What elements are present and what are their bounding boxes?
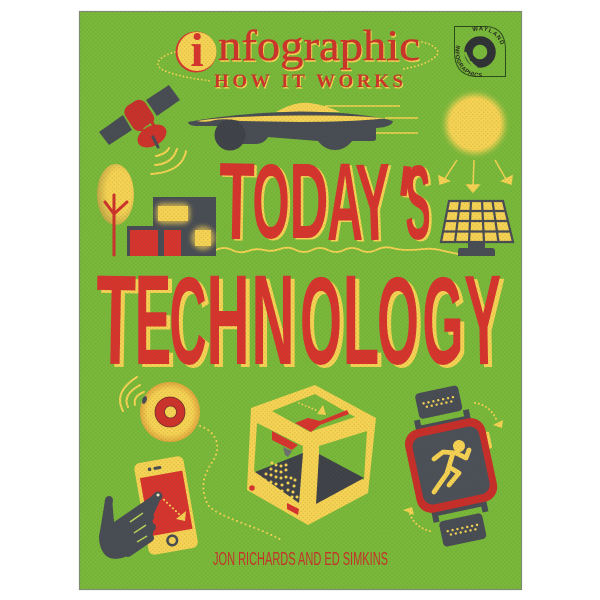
smartphone: [133, 455, 199, 556]
chassis: [188, 112, 393, 150]
solar car: [188, 103, 418, 150]
main title: technology: N: [251, 250, 295, 392]
smartwatch: [395, 381, 510, 551]
main title: today's: S: [405, 143, 431, 262]
solar panel: [441, 201, 513, 256]
main title: today's: O: [252, 144, 290, 261]
left opening: [254, 423, 303, 503]
red doors: [130, 230, 158, 256]
rotate arrows: [403, 403, 503, 531]
dotted connector from disc to printer: [200, 426, 283, 541]
i badge: i: [190, 24, 204, 77]
slot: [287, 503, 299, 515]
signal arcs: [120, 377, 144, 411]
main title: today's: [218, 139, 431, 275]
3D printer: [247, 385, 376, 525]
green background: [80, 12, 522, 590]
main title: technology: Y: [463, 248, 503, 392]
left build plate: [255, 453, 303, 503]
sun ray arrows: [439, 160, 512, 192]
frame: [247, 385, 376, 525]
main title: technology: T: [95, 248, 137, 392]
main title: today's: A: [327, 142, 363, 264]
main title: today's: Y: [354, 141, 393, 265]
signal waves: [151, 148, 186, 174]
building: [127, 197, 216, 256]
dish: [134, 120, 170, 152]
sun: [446, 94, 504, 154]
main title: technology: L: [343, 250, 379, 392]
main title: today's: T: [218, 139, 255, 263]
dotted ring around series title: [158, 42, 438, 81]
authors: JON RICHARDS AND ED SIMKINS: [213, 549, 388, 569]
straps: [414, 385, 463, 419]
main title: today's: D: [290, 142, 328, 262]
right opening: [319, 431, 367, 480]
smart speaker disc: [120, 377, 200, 442]
top opening: [272, 394, 355, 432]
main title: today's: ': [385, 141, 418, 275]
word infographic: nfographic: [218, 23, 420, 70]
i badge: [176, 24, 216, 77]
speed lines: [325, 106, 418, 133]
window glow: [156, 203, 190, 224]
yellow stripe: [197, 115, 385, 122]
right build plate: [316, 454, 364, 504]
satellite: [99, 85, 186, 174]
main title: technology: C: [169, 253, 207, 391]
publisher logo: [454, 26, 506, 78]
main title: technology: H: [206, 250, 250, 392]
swipe arrow: [161, 497, 186, 521]
publisher logo: WAYLAND: [472, 26, 504, 44]
power button: [249, 485, 255, 491]
runner icon: [434, 440, 469, 492]
main title: technology: O: [377, 252, 419, 391]
top arrow: [299, 403, 326, 415]
main title: technology: O: [300, 252, 342, 391]
main title: technology: G: [422, 253, 464, 391]
halftone texture: [80, 12, 521, 589]
gantry: [295, 410, 349, 432]
cockpit: [276, 103, 340, 112]
wheel: [214, 120, 246, 150]
satellite body: [121, 97, 157, 134]
tree: [97, 164, 134, 255]
series title: [158, 23, 438, 92]
printed dots: [258, 462, 298, 498]
wavy connector line: [216, 247, 458, 254]
print head: [272, 431, 298, 450]
publisher logo: INFOGRAPHICS: [455, 45, 482, 78]
how it works: HOW IT WORKS: [214, 71, 403, 92]
hand: [99, 492, 161, 559]
case: [402, 415, 500, 516]
screen: [411, 425, 492, 506]
main title: technology: E: [135, 248, 171, 391]
main title: technology: [95, 248, 503, 392]
side button: [484, 431, 492, 449]
solar wings: [99, 85, 180, 145]
